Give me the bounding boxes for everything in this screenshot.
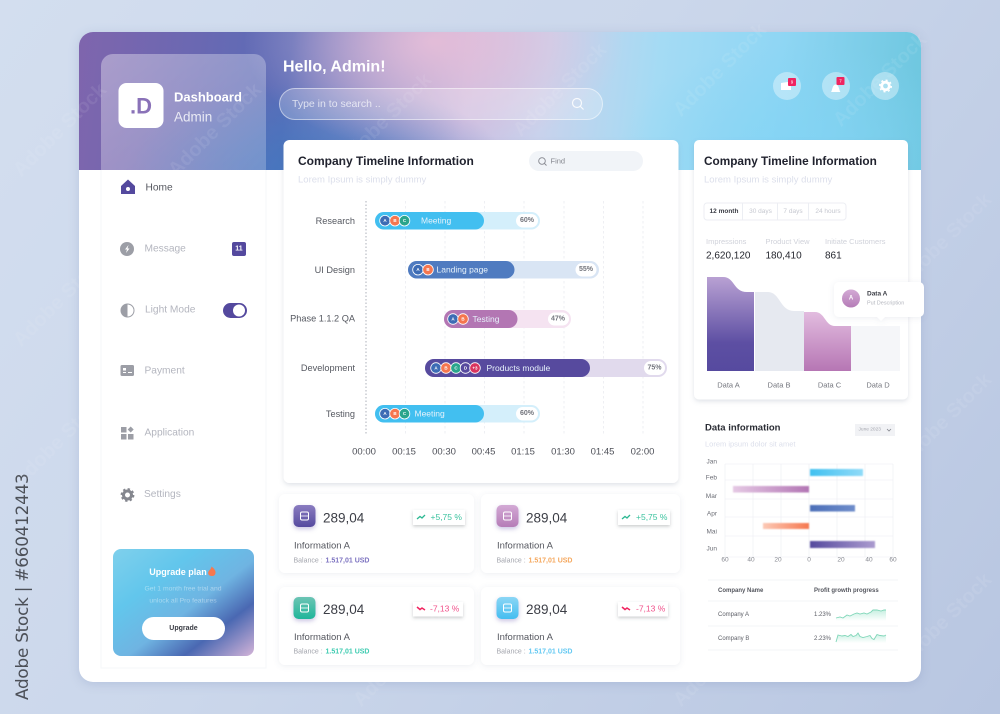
bar: testing: Meeting bbox=[414, 409, 445, 419]
watermark pattern: Adobe Stock bbox=[894, 188, 997, 291]
stat card: teal: 1.517,01 USD bbox=[326, 648, 369, 656]
upgrade card: Upgrade plan bbox=[149, 567, 207, 577]
bar: testing bbox=[375, 405, 540, 422]
row labels: Development bbox=[301, 363, 355, 373]
diverging bar chart: 40 bbox=[865, 556, 873, 564]
step area chart: Data A bbox=[717, 380, 740, 390]
search bar: Type in to search .. bbox=[292, 98, 381, 110]
watermark pattern: Adobe Stock bbox=[894, 368, 997, 471]
watermark pattern: Adobe Stock bbox=[894, 568, 997, 671]
watermark pattern: Adobe Stock bbox=[349, 608, 452, 711]
time axis bbox=[352, 446, 654, 458]
metrics: 861 bbox=[825, 250, 842, 262]
diverging bar chart: Mar bbox=[706, 493, 718, 500]
find box: Find bbox=[550, 156, 565, 166]
diverging bar chart: Feb bbox=[706, 474, 717, 482]
metrics: 2,620,120 bbox=[706, 250, 751, 262]
metrics: Initiate Customers bbox=[825, 237, 886, 246]
diverging bar chart bbox=[706, 458, 897, 564]
bar: UI design: 55% bbox=[579, 266, 594, 273]
stat card: pink: Information A bbox=[497, 540, 554, 552]
panel: company timeline step chart bbox=[694, 140, 924, 400]
time axis: 01:15 bbox=[511, 446, 535, 458]
bar: UI design: A bbox=[416, 267, 420, 272]
bar: research: 60% bbox=[520, 217, 535, 224]
nav: message bbox=[120, 242, 246, 256]
watermark pattern: Adobe Stock bbox=[9, 388, 112, 491]
icon: mail with badge: 9 bbox=[791, 80, 794, 84]
row labels: Research bbox=[316, 216, 355, 226]
bar: UI design: Landing page bbox=[436, 265, 488, 275]
company table: 1.23% bbox=[814, 612, 832, 618]
stock id side text: Adobe Stock | #660412443 bbox=[12, 473, 32, 700]
time axis: 00:15 bbox=[392, 446, 416, 458]
bar: testing: C bbox=[403, 411, 407, 416]
stat card: pink: Balance : bbox=[496, 558, 526, 564]
sparkline: company B bbox=[836, 633, 886, 643]
nav: message: 11 bbox=[235, 246, 243, 252]
stat card: purple: +5,75 % bbox=[430, 512, 462, 522]
step area chart: Data C bbox=[818, 380, 842, 390]
row labels: Testing bbox=[326, 409, 355, 419]
diverging bar chart: Apr bbox=[707, 510, 718, 518]
row labels bbox=[290, 216, 356, 419]
nav: payment bbox=[120, 365, 185, 376]
nav: message: Message bbox=[144, 244, 186, 254]
stat card: blue bbox=[481, 587, 680, 665]
icon: bell with badge bbox=[822, 72, 850, 100]
logo tile bbox=[118, 83, 164, 128]
bar: UI design: B bbox=[426, 267, 430, 272]
bar: development: B bbox=[444, 366, 448, 370]
tooltip: Put Description bbox=[867, 300, 904, 306]
step area chart bbox=[707, 277, 900, 390]
step area chart: Data D bbox=[866, 380, 890, 390]
bar: phase QA: Testing bbox=[472, 314, 500, 324]
stat card: blue: 1.517,01 USD bbox=[528, 648, 572, 656]
sparkline: company A bbox=[836, 610, 886, 621]
stat card: purple: Information A bbox=[294, 540, 351, 552]
time axis: 02:00 bbox=[631, 446, 654, 458]
company table bbox=[708, 580, 898, 650]
bar: development: A bbox=[434, 366, 438, 370]
bar: phase QA: 47% bbox=[551, 316, 566, 322]
heading: Data information bbox=[705, 422, 781, 434]
subtitle: Lorem ipsum dolor sit amet bbox=[705, 440, 796, 448]
metrics: 180,410 bbox=[766, 250, 802, 262]
stat card: blue: Balance : bbox=[496, 648, 526, 656]
dashboard panel bbox=[79, 32, 921, 682]
nav: home: Home bbox=[146, 182, 173, 194]
upgrade card: Get 1 month free trial and bbox=[144, 586, 222, 592]
row labels: Phase 1.1.2 QA bbox=[290, 314, 356, 324]
watermark pattern: Adobe Stock bbox=[9, 78, 112, 181]
company table: Company Name bbox=[718, 588, 764, 594]
icon: settings gear bbox=[871, 72, 899, 100]
diverging bar chart: 20 bbox=[837, 556, 845, 564]
subtitle: Lorem Ipsum is simply dummy bbox=[704, 174, 833, 186]
step area chart: Data B bbox=[768, 380, 790, 390]
stat card: blue: 289,04 bbox=[526, 602, 568, 617]
search bar bbox=[280, 88, 602, 120]
brand name bbox=[174, 90, 242, 124]
subtitle: Lorem Ipsum is simply dummy bbox=[298, 174, 427, 186]
time axis: 00:30 bbox=[432, 446, 456, 458]
tooltip: Data A bbox=[867, 290, 888, 298]
heading: Company Timeline Information bbox=[704, 154, 877, 168]
month dropdown: June 2023 bbox=[858, 426, 881, 432]
bar: research: A bbox=[383, 218, 387, 223]
bar: testing: A bbox=[383, 411, 387, 416]
company table: Company B bbox=[718, 636, 749, 642]
stat card: purple: Balance : bbox=[294, 558, 323, 564]
range tabs bbox=[704, 203, 846, 220]
stat card: pink: 289,04 bbox=[526, 510, 568, 526]
range tabs: 12 month bbox=[710, 208, 738, 215]
stat card: pink: +5,75 % bbox=[636, 512, 668, 522]
tooltip bbox=[834, 282, 924, 321]
bar: research: Meeting bbox=[421, 216, 452, 226]
upgrade card: Upgrade bbox=[169, 625, 198, 632]
bar: phase QA: A bbox=[451, 316, 455, 322]
watermark pattern: Adobe Stock bbox=[334, 68, 437, 171]
stat card: teal bbox=[279, 587, 474, 665]
diverging bar chart: 0 bbox=[807, 556, 811, 564]
bar: development: D bbox=[464, 366, 468, 370]
month dropdown bbox=[855, 424, 895, 436]
bar: development bbox=[425, 359, 667, 377]
bar: development: 75% bbox=[647, 364, 662, 372]
row labels: UI Design bbox=[315, 265, 355, 275]
time grid bbox=[366, 201, 643, 435]
stat card: teal: Information A bbox=[294, 632, 351, 643]
stat card: teal: 289,04 bbox=[323, 602, 365, 617]
range tabs: 7 days bbox=[783, 208, 803, 215]
diverging bar chart: 60 bbox=[889, 556, 897, 564]
bar: testing: B bbox=[393, 411, 397, 416]
stat card: teal: Balance : bbox=[294, 648, 323, 656]
bar: phase QA bbox=[444, 310, 571, 328]
diverging bar chart: Mai bbox=[707, 528, 717, 536]
icon: flame bbox=[208, 566, 216, 576]
stat card: purple: 289,04 bbox=[323, 510, 365, 526]
panel: data information bbox=[705, 422, 898, 650]
watermark pattern: Adobe Stock bbox=[669, 608, 772, 711]
heading: greeting: Hello, Admin! bbox=[283, 58, 386, 76]
nav: home bbox=[121, 180, 173, 194]
nav: application: Application bbox=[144, 428, 194, 438]
watermark pattern: Adobe Stock bbox=[829, 28, 932, 131]
stat card: teal: -7,13 % bbox=[430, 604, 460, 614]
nav: settings: Settings bbox=[144, 489, 181, 500]
bar: research: B bbox=[393, 218, 397, 223]
time axis: 01:45 bbox=[591, 446, 614, 458]
nav: application bbox=[121, 426, 194, 440]
company table: Profit growth progress bbox=[814, 588, 879, 594]
time axis: 00:00 bbox=[352, 446, 376, 458]
watermark pattern: Adobe Stock bbox=[509, 38, 612, 141]
diverging bar chart: 20 bbox=[774, 556, 782, 564]
icon: bell with badge: 7 bbox=[839, 78, 842, 84]
metrics: Product View bbox=[766, 237, 810, 246]
icon: mail with badge bbox=[773, 72, 801, 100]
sidebar body outline bbox=[101, 170, 266, 668]
stat card: blue: -7,13 % bbox=[636, 604, 666, 614]
logo tile: .D bbox=[130, 94, 152, 118]
nav: light mode toggle bbox=[121, 303, 247, 318]
metrics: Impressions bbox=[706, 237, 747, 246]
nav: payment: Payment bbox=[144, 366, 185, 376]
brand name: Dashboard bbox=[174, 90, 242, 104]
diverging bar chart: 60 bbox=[721, 556, 729, 564]
watermark pattern: Adobe Stock bbox=[164, 78, 267, 181]
header gradient band bbox=[79, 32, 921, 170]
bar: development: C bbox=[454, 366, 458, 370]
watermark pattern: Adobe Stock bbox=[669, 18, 772, 121]
diverging bar chart: Jun bbox=[707, 546, 717, 552]
bar: development: Products module bbox=[486, 363, 551, 373]
range tabs: 24 hours bbox=[815, 208, 841, 215]
diverging bar chart: Jan bbox=[707, 458, 717, 466]
company table: 2.23% bbox=[814, 636, 832, 642]
time axis: 00:45 bbox=[472, 446, 495, 458]
diverging bar chart: 40 bbox=[747, 556, 755, 564]
stat card: blue: Information A bbox=[497, 632, 554, 643]
upgrade card: unlock all Pro features bbox=[149, 598, 217, 604]
find box bbox=[529, 151, 643, 171]
metrics bbox=[706, 237, 886, 262]
bar: research bbox=[375, 212, 540, 230]
company table: Company A bbox=[718, 612, 749, 618]
heading: Company Timeline Information bbox=[298, 154, 474, 168]
bar: phase QA: B bbox=[461, 316, 465, 322]
stat card: pink bbox=[481, 494, 680, 573]
bar: UI design bbox=[408, 261, 599, 278]
bar: development: +3 bbox=[472, 366, 478, 370]
brand name: Admin bbox=[174, 110, 212, 124]
panel: sidebar bbox=[101, 54, 266, 668]
stat card: purple: 1.517,01 USD bbox=[326, 558, 369, 564]
bar: research: C bbox=[403, 218, 407, 223]
bar: testing: 60% bbox=[520, 410, 535, 417]
nav: settings bbox=[122, 489, 181, 501]
stat card: purple bbox=[279, 494, 474, 573]
watermark pattern: Adobe Stock bbox=[9, 248, 112, 351]
panel: company timeline gantt bbox=[284, 140, 678, 483]
time axis: 01:30 bbox=[551, 446, 575, 458]
upgrade card bbox=[113, 549, 254, 656]
stat card: pink: 1.517,01 USD bbox=[528, 558, 572, 564]
nav: light mode toggle: Light Mode bbox=[145, 304, 196, 316]
sidebar glass header bbox=[101, 54, 266, 170]
range tabs: 30 days bbox=[749, 208, 773, 215]
tooltip: A bbox=[849, 296, 854, 302]
